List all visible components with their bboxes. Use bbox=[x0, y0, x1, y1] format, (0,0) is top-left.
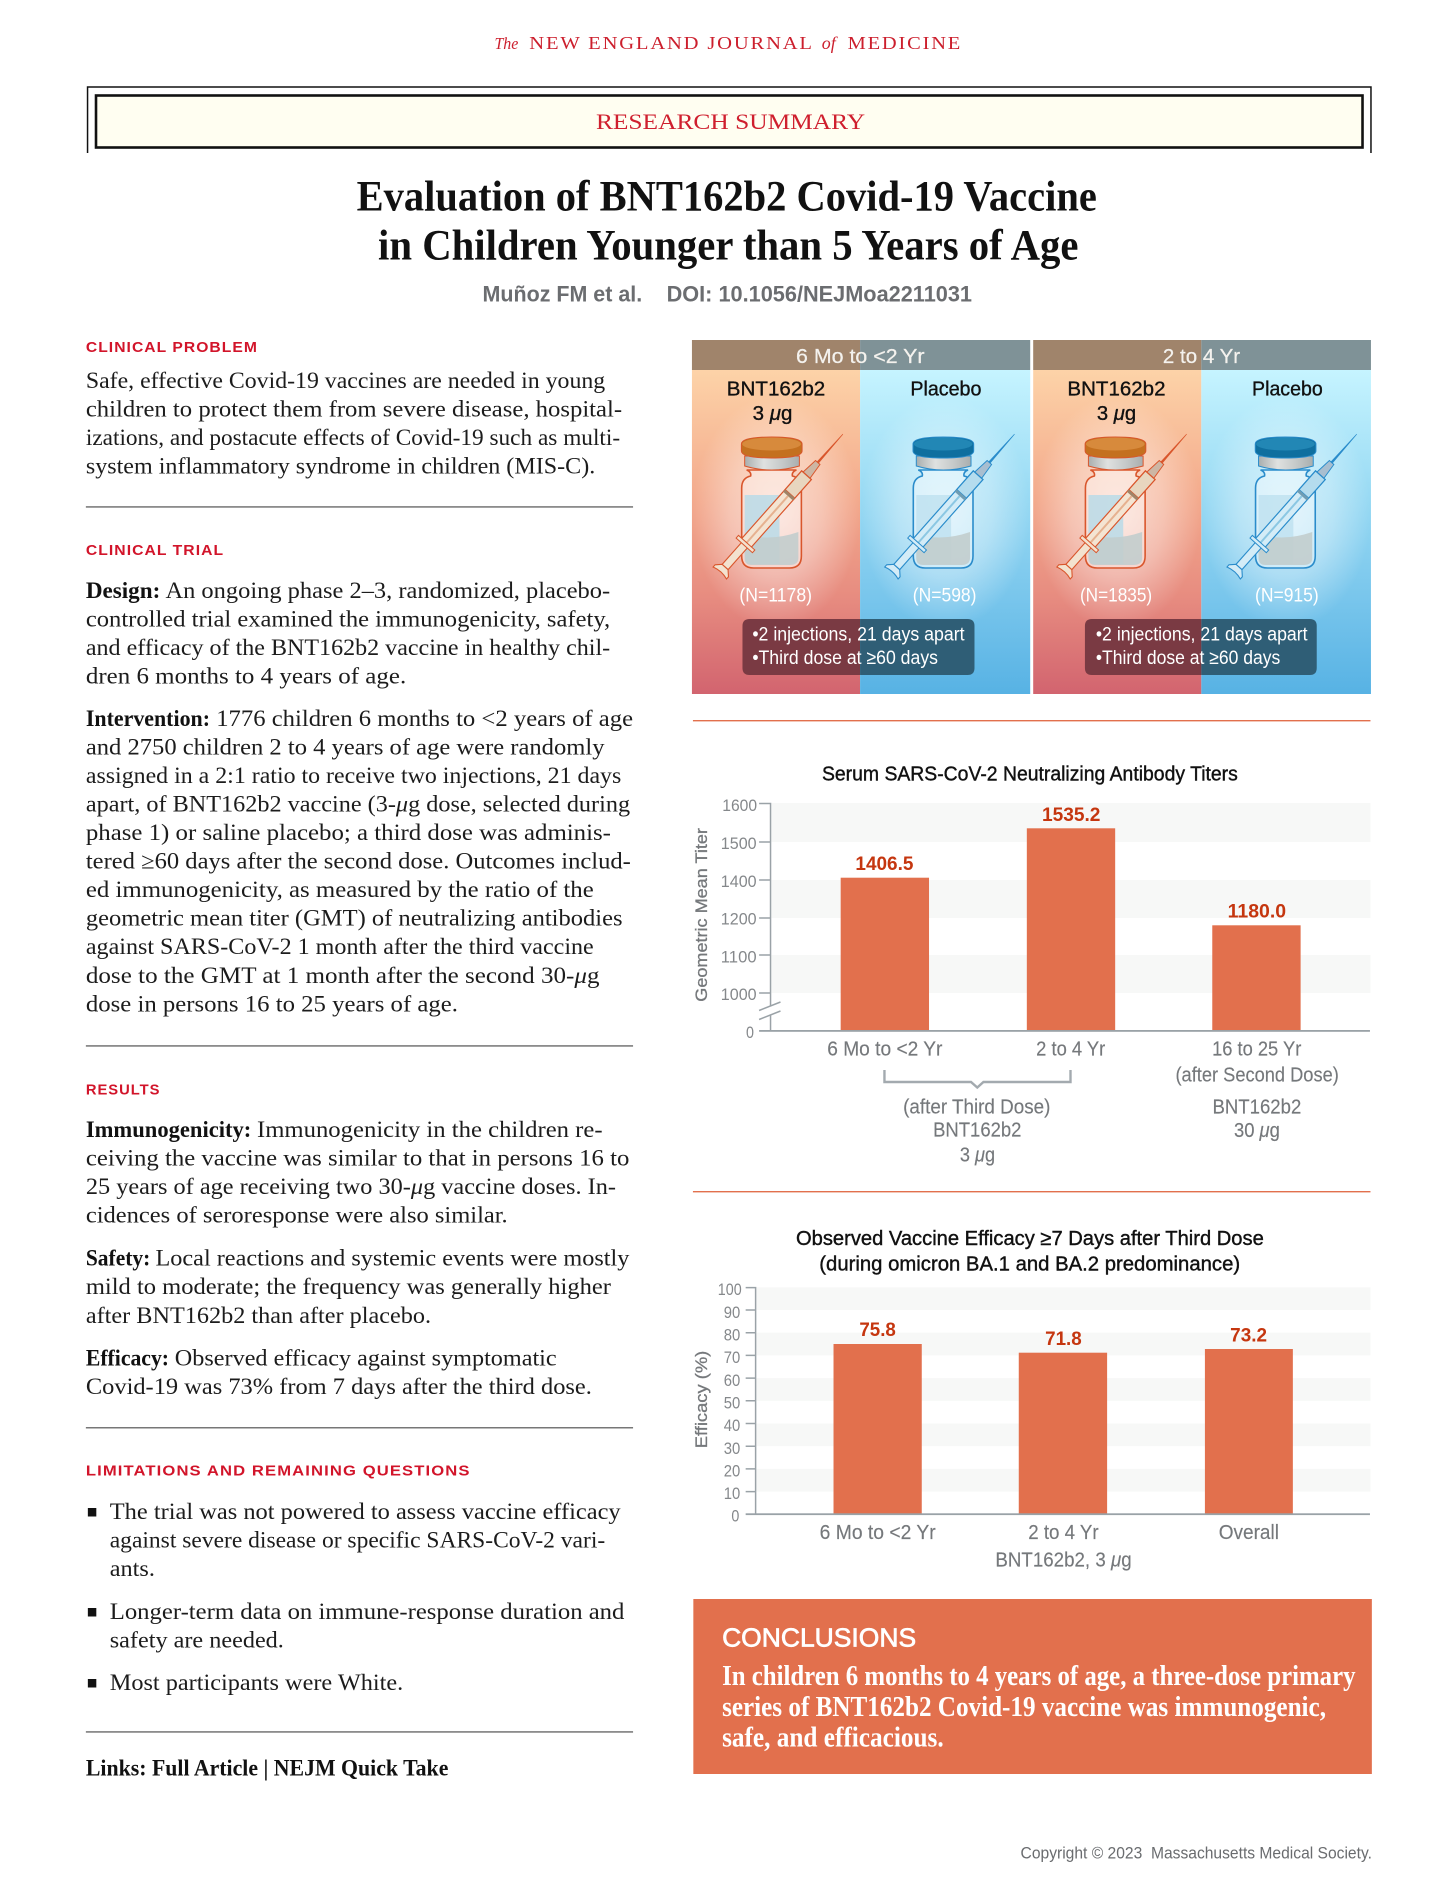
text block: intervention: against SARS-CoV-2 1 month after the third vaccine bbox=[86, 934, 594, 959]
panel: 2 to 4 yr: (N=1835) bbox=[1080, 584, 1152, 607]
text block: immunogenicity: ceiving the vaccine was similar to that in persons 16 to bbox=[86, 1145, 629, 1171]
x axis labels: Overall bbox=[1219, 1522, 1279, 1544]
text block: clinical problem: izations, and postacute effects of Covid-19 such as multi- bbox=[86, 425, 620, 450]
banner: research summary bbox=[88, 87, 1371, 153]
panel: 6 mo to under 2 yr: (N=1178) bbox=[739, 584, 812, 607]
journal masthead: NEW ENGLAND JOURNAL bbox=[529, 33, 814, 53]
y axis: 1600 bbox=[722, 796, 757, 815]
text block: immunogenicity: cidences of seroresponse were also similar. bbox=[86, 1202, 508, 1228]
section: clinical problem bbox=[86, 339, 622, 479]
bullet: longer-term data bbox=[88, 1599, 625, 1653]
panel: 2 to 4 yr: BNT162b2 bbox=[1067, 377, 1166, 401]
banner: research summary: RESEARCH SUMMARY bbox=[596, 109, 865, 134]
text block: immunogenicity: 25 years of age receiving two 30- μg vaccine doses. In- bbox=[86, 1174, 616, 1199]
y axis bbox=[692, 1280, 756, 1526]
icon: BNT162b2 vial and syringe bbox=[1055, 427, 1195, 580]
icon: BNT162b2 vial and syringe bbox=[712, 427, 851, 580]
title: in Children Younger than 5 Years of Age bbox=[378, 222, 1078, 270]
bullet: participants: Most participants were White. bbox=[110, 1670, 403, 1695]
y axis: 0 bbox=[731, 1506, 739, 1526]
x axis labels bbox=[820, 1522, 1279, 1572]
x axis labels: BNT162b2 bbox=[1212, 1096, 1301, 1118]
text block: conclusions bbox=[722, 1661, 1356, 1754]
text block: intervention: and 2750 children 2 to 4 years of age were randomly bbox=[86, 734, 605, 760]
panel: 2 to 4 yr bbox=[1033, 340, 1371, 694]
panel: 2 to 4 yr: Placebo bbox=[1252, 377, 1323, 401]
x axis labels: BNT162b2, 3 μg bbox=[995, 1549, 1132, 1572]
heading: clinical trial: CLINICAL TRIAL bbox=[86, 542, 224, 559]
chart: observed vaccine efficacy bbox=[692, 1227, 1370, 1572]
panel: trial arms illustration bbox=[692, 340, 1371, 694]
heading: limitations: LIMITATIONS AND REMAINING QUESTIONS bbox=[86, 1462, 471, 1480]
text block: efficacy: Covid-19 was 73% from 7 days after the third dose. bbox=[86, 1374, 592, 1399]
text block: conclusions: In children 6 months to 4 years of age, a three-dose primary bbox=[722, 1661, 1356, 1692]
x axis labels: 6 Mo to <2 Yr bbox=[827, 1038, 943, 1061]
text block: efficacy bbox=[86, 1345, 592, 1399]
x axis labels: 2 to 4 Yr bbox=[1036, 1038, 1106, 1061]
text block: immunogenicity: Immunogenicity: bbox=[86, 1117, 251, 1142]
journal masthead: The bbox=[494, 34, 519, 53]
bars bbox=[834, 1319, 1293, 1514]
text block: intervention: dose in persons 16 to 25 years of age. bbox=[86, 991, 458, 1017]
text block: intervention: Intervention: bbox=[86, 706, 210, 731]
y axis: 1400 bbox=[721, 872, 757, 891]
callout: dosing bbox=[1085, 619, 1317, 675]
text block: immunogenicity bbox=[86, 1117, 629, 1228]
text block: intervention: tered ≥60 days after the second dose. Outcomes includ- bbox=[86, 848, 631, 874]
bars: 73.2 bbox=[1230, 1324, 1267, 1346]
text block: intervention: dose to the GMT at 1 month after the second 30- μg bbox=[86, 963, 600, 988]
text block: intervention: phase 1) or saline placebo; a third dose was adminis- bbox=[86, 820, 611, 845]
panel: 6 mo to under 2 yr: Placebo bbox=[910, 377, 981, 401]
section: results bbox=[86, 1081, 630, 1399]
text block: immunogenicity: Immunogenicity in the children re- bbox=[257, 1117, 603, 1142]
text block: clinical problem bbox=[86, 368, 622, 479]
text block: intervention: assigned in a 2:1 ratio to receive two injections, 21 days bbox=[86, 763, 621, 788]
text block: design: Design: bbox=[86, 578, 160, 603]
x axis labels: 30 μg bbox=[1234, 1120, 1280, 1142]
section: clinical trial bbox=[86, 542, 633, 1017]
text block: intervention: 1776 children 6 months to <2 years of age bbox=[216, 706, 633, 731]
x axis labels: (after Third Dose) bbox=[903, 1096, 1050, 1118]
panel: 2 to 4 yr: 3 μg bbox=[1097, 402, 1136, 425]
bars: 1180.0 bbox=[1228, 901, 1286, 923]
y axis: 1000 bbox=[721, 985, 757, 1004]
text block: design: and efficacy of the BNT162b2 vaccine in healthy chil- bbox=[86, 635, 610, 660]
panel: 6 mo to under 2 yr: 6 Mo to <2 Yr bbox=[796, 345, 925, 368]
bullet: not powered bbox=[88, 1499, 621, 1581]
panel: 6 mo to under 2 yr: 3 μg bbox=[753, 402, 792, 425]
bullet: longer-term data: safety are needed. bbox=[110, 1627, 284, 1653]
text block: intervention bbox=[86, 706, 633, 1017]
x axis labels: 3 μg bbox=[960, 1145, 995, 1167]
icon: placebo vial and syringe bbox=[883, 427, 1023, 580]
y axis: 20 bbox=[724, 1461, 740, 1481]
text block: safety: after BNT162b2 than after placebo. bbox=[86, 1303, 431, 1328]
bullet: not powered: against severe disease or specific SARS-CoV-2 vari- bbox=[110, 1527, 605, 1553]
x axis labels: BNT162b2 bbox=[933, 1120, 1021, 1142]
y axis: 10 bbox=[724, 1484, 740, 1503]
text block: efficacy: Observed efficacy against symptomatic bbox=[175, 1345, 557, 1371]
text block: conclusions: series of BNT162b2 Covid-19 vaccine was immunogenic, bbox=[722, 1692, 1326, 1723]
text block: intervention: apart, of BNT162b2 vaccine (3- μg dose, selected during bbox=[86, 791, 631, 817]
y axis: 1100 bbox=[721, 947, 757, 967]
bullet: longer-term data: Longer-term data on immune-response duration and bbox=[110, 1599, 625, 1624]
y axis: 1200 bbox=[721, 909, 757, 929]
y axis: 40 bbox=[724, 1416, 740, 1435]
callout: dosing bbox=[742, 619, 974, 675]
y axis: 80 bbox=[724, 1325, 740, 1345]
panel: 2 to 4 yr: (N=915) bbox=[1255, 584, 1319, 607]
text block: clinical problem: children to protect them from severe disease, hospital- bbox=[86, 396, 622, 422]
y axis: 0 bbox=[746, 1023, 754, 1042]
text block: design: controlled trial examined the immunogenicity, safety, bbox=[86, 606, 610, 632]
x axis labels: 6 Mo to <2 Yr bbox=[820, 1522, 936, 1544]
links: Links: Full Article | NEJM Quick Take bbox=[86, 1755, 448, 1781]
y axis: 100 bbox=[718, 1280, 742, 1299]
text block: conclusions: safe, and efficacious. bbox=[722, 1722, 944, 1754]
text block: safety: Local reactions and systemic events were mostly bbox=[156, 1245, 630, 1271]
y axis: 1500 bbox=[721, 834, 757, 853]
bars: 75.8 bbox=[859, 1319, 896, 1341]
text block: intervention: ed immunogenicity, as measured by the ratio of the bbox=[86, 877, 594, 902]
bars: 1535.2 bbox=[1042, 804, 1101, 826]
bars: 1406.5 bbox=[855, 853, 914, 875]
title bbox=[357, 173, 1097, 270]
panel: 6 mo to under 2 yr bbox=[692, 340, 1030, 694]
y axis: 70 bbox=[724, 1348, 740, 1367]
callout: dosing: •Third dose at ≥60 days bbox=[752, 647, 938, 669]
copyright: Copyright © 2023 Massachusetts Medical Society. bbox=[1021, 1844, 1372, 1863]
y axis: Geometric Mean Titer bbox=[692, 828, 711, 1002]
chart title: (during omicron BA.1 and BA.2 predominance) bbox=[819, 1252, 1240, 1276]
heading: results: RESULTS bbox=[86, 1081, 160, 1099]
y axis: 50 bbox=[724, 1393, 740, 1413]
heading: clinical problem: CLINICAL PROBLEM bbox=[86, 339, 258, 356]
y axis: 60 bbox=[724, 1371, 740, 1390]
chart title: Observed Vaccine Efficacy ≥7 Days after Third Dose bbox=[796, 1227, 1264, 1250]
journal masthead: MEDICINE bbox=[848, 33, 962, 53]
panel: 2 to 4 yr: 2 to 4 Yr bbox=[1163, 345, 1240, 368]
x axis labels bbox=[827, 1038, 1339, 1167]
text block: efficacy: Efficacy: bbox=[86, 1345, 169, 1371]
bullet: not powered: ants. bbox=[110, 1556, 155, 1581]
chart title bbox=[796, 1227, 1264, 1276]
chart: neutralizing antibody titers bbox=[692, 762, 1370, 1167]
text block: design: dren 6 months to 4 years of age. bbox=[86, 663, 406, 689]
text block: design bbox=[86, 578, 610, 689]
byline and DOI: DOI: 10.1056/NEJMoa2211031 bbox=[667, 281, 972, 307]
callout: dosing: •Third dose at ≥60 days bbox=[1096, 647, 1281, 669]
callout: dosing: •2 injections, 21 days apart bbox=[1096, 623, 1308, 646]
panel: 6 mo to under 2 yr: BNT162b2 bbox=[727, 377, 825, 401]
callout: dosing: •2 injections, 21 days apart bbox=[752, 623, 965, 646]
section: limitations and remaining questions bbox=[86, 1462, 625, 1695]
panel: conclusions bbox=[693, 1599, 1372, 1774]
bars: 71.8 bbox=[1045, 1328, 1082, 1350]
text block: design: An ongoing phase 2–3, randomized, placebo- bbox=[165, 578, 610, 603]
text block: intervention: geometric mean titer (GMT) of neutralizing antibodies bbox=[86, 905, 623, 931]
text block: clinical problem: system inflammatory syndrome in children (MIS-C). bbox=[86, 453, 595, 479]
journal masthead bbox=[494, 33, 962, 53]
y axis: 30 bbox=[724, 1439, 740, 1458]
x axis labels: 2 to 4 Yr bbox=[1028, 1522, 1099, 1544]
x axis labels: (after Second Dose) bbox=[1175, 1064, 1339, 1087]
bars bbox=[841, 804, 1301, 1031]
y axis: 90 bbox=[724, 1303, 740, 1322]
panel: 6 mo to under 2 yr: (N=598) bbox=[913, 584, 976, 607]
bullet: not powered: The trial was not powered to assess vaccine efficacy bbox=[110, 1499, 621, 1524]
icon: placebo vial and syringe bbox=[1225, 427, 1365, 580]
text block: safety: Safety: bbox=[86, 1245, 150, 1271]
text block: safety bbox=[86, 1245, 630, 1328]
y axis: Efficacy (%) bbox=[692, 1351, 711, 1448]
title: Evaluation of BNT162b2 Covid-19 Vaccine bbox=[357, 173, 1097, 221]
heading: conclusions: CONCLUSIONS bbox=[722, 1624, 916, 1653]
x axis labels: 16 to 25 Yr bbox=[1212, 1038, 1302, 1061]
byline and DOI bbox=[483, 281, 972, 307]
chart title: Serum SARS-CoV-2 Neutralizing Antibody Titers bbox=[822, 762, 1238, 786]
journal masthead: of bbox=[822, 33, 839, 53]
y axis bbox=[692, 796, 780, 1042]
text block: clinical problem: Safe, effective Covid-19 vaccines are needed in young bbox=[86, 368, 606, 393]
byline and DOI: Muñoz FM et al. bbox=[483, 281, 642, 307]
text block: safety: mild to moderate; the frequency was generally higher bbox=[86, 1274, 611, 1299]
